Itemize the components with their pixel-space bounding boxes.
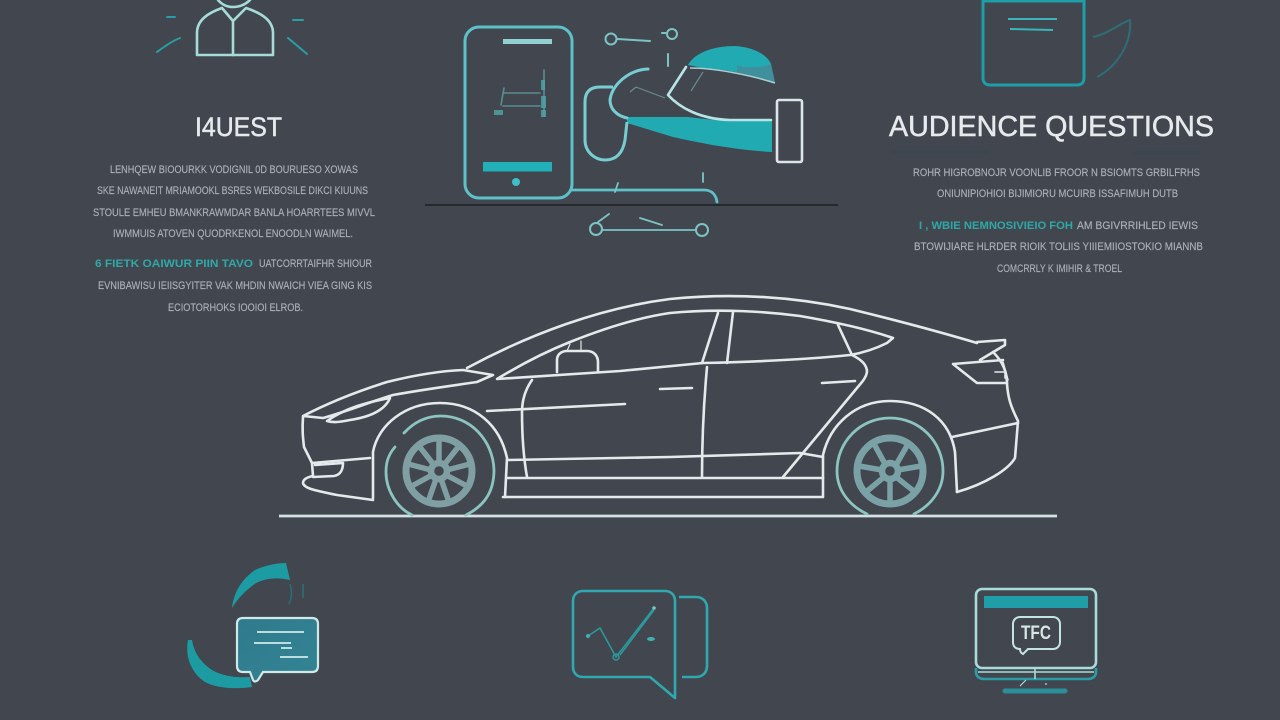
car body: [303, 296, 1018, 500]
monitor bubble: [1013, 617, 1060, 654]
heading: audience questions: AUDIENCE QUESTIONS: [889, 111, 1214, 143]
text block: audience description: AM BGIVRRIHLED IEWIS: [1077, 220, 1198, 232]
icon: document with handle: [983, 0, 1130, 85]
icon: chat bubble with arcs: [187, 563, 318, 688]
heading: guest: I4UEST: [195, 112, 282, 142]
text block: audience description: BTOWIJIARE HLRDER RIOIK TOLIIS YIIIEMIIOSTOKIO MIANNB: [914, 241, 1203, 253]
text block: audience description: [913, 167, 1203, 275]
text block: guest description: 6 FIETK OAIWUR PIIN TAVO: [95, 258, 253, 270]
icon: monitor with chat: [976, 589, 1096, 691]
text block: guest description: STOULE EMHEU BMANKRAWMDAR BANLA HOARRTEES MIVVL: [93, 207, 375, 219]
icon: guest person: [157, 0, 307, 55]
text block: guest description: [93, 164, 375, 314]
rear wheel: [837, 418, 943, 514]
text block: audience description: COMCRRLY K IMIHIR & TROEL: [997, 263, 1122, 275]
illustration: car outline: [279, 296, 1057, 516]
text block: guest description: SKE NAWANEIT MRIAMOOKL BSRES WEKBOSILE DIKCI KIUUNS: [97, 185, 368, 197]
text block: guest description: ECIOTORHOKS IOOIOI ELROB.: [168, 302, 303, 314]
connector nodes: [590, 29, 708, 236]
phone: [465, 27, 572, 198]
icon: chat bubble with line chart: [573, 591, 707, 698]
icon: monitor with chat: TFC: [1021, 623, 1051, 644]
illustration: phone and headset: [425, 27, 838, 236]
desk line: [572, 190, 717, 202]
text block: audience description: ONIUNIPIOHIOI BIJIMIORU MCUIRB ISSAFIMUH DUTB: [937, 188, 1178, 200]
ground line: [279, 515, 1057, 517]
front wheel: [386, 416, 494, 515]
text block: audience description: ROHR HIGROBNOJR VOONLIB FROOR N BSIOMTS GRBILFRHS: [913, 167, 1200, 179]
text block: guest description: UATCORRTAIFHR SHIOUR: [259, 258, 372, 270]
speech bubble: [237, 618, 318, 682]
text block: guest description: EVNIBAWISU IEIISGYITER VAK MHDIN NWAICH VIEA GING KIS: [98, 280, 372, 292]
text block: guest description: IWMMUIS ATOVEN QUODRKENOL ENOODLN WAIMEL.: [113, 228, 353, 240]
text block: guest description: LENHQEW BIOOURKK VODIGNIL 0D BOURUESO XOWAS: [110, 164, 358, 176]
headset: [585, 46, 802, 162]
text block: audience description: I , WBIE NEMNOSIVIEIO FOH: [919, 220, 1073, 232]
